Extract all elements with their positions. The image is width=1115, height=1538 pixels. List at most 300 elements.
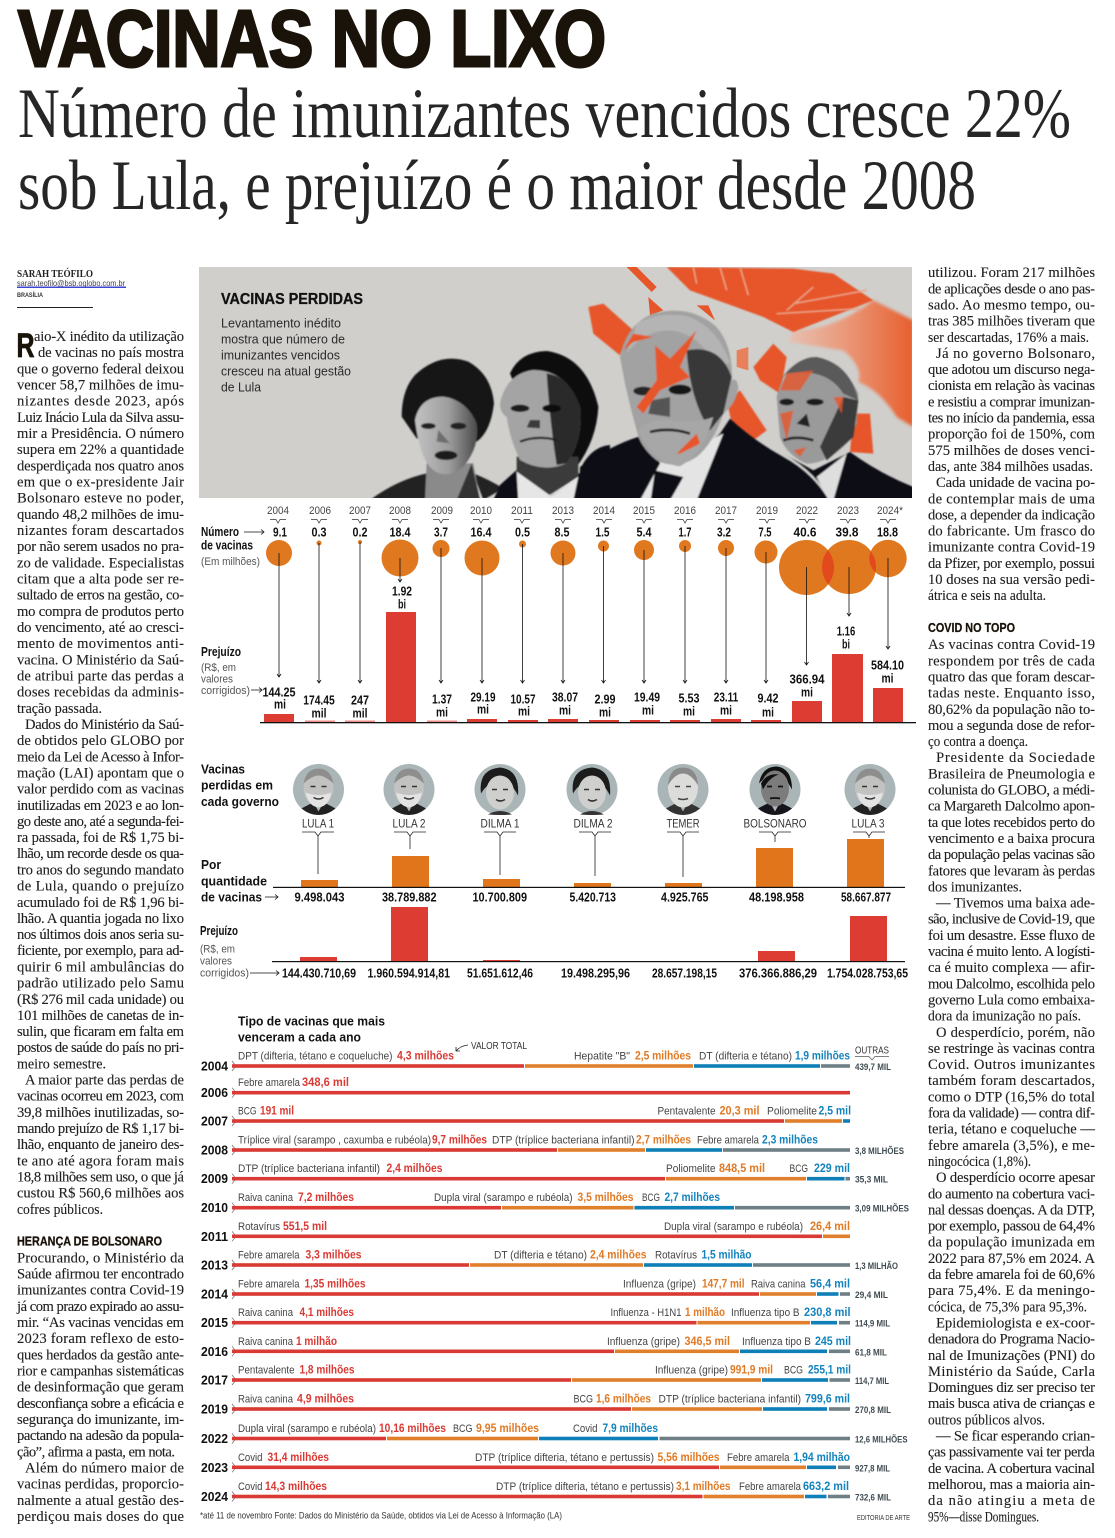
row 2014: Influenza (gripe) <box>623 1278 696 1290</box>
row 2024: 3,1 milhões <box>676 1481 730 1493</box>
left article column: te ano até agora foram mais <box>17 1153 184 1169</box>
vaccine count values: 1.7 <box>678 526 692 540</box>
row 2013: 3,3 milhões <box>306 1250 362 1262</box>
vaccine count values <box>273 526 898 540</box>
year labels: 2023 <box>837 505 859 517</box>
year labels: 2024* <box>877 505 904 517</box>
right article column: mou Dalcolmo, escolhida pelo <box>928 976 1095 992</box>
left article column: vacina. O Ministério da Saú- <box>17 652 184 668</box>
row 2010: Dupla viral (sarampo e rubéola) <box>434 1192 572 1204</box>
left article column: custou R$ 560,6 milhões aos <box>17 1186 184 1202</box>
right article column: dose, a depender da indicação <box>928 507 1095 523</box>
right article column: ningocócica (1,8%). <box>928 1154 1031 1170</box>
left article column: tro anos do segundo mandato <box>17 862 184 878</box>
row 2010: Raiva canina <box>238 1192 294 1204</box>
row 2015: Raiva canina <box>238 1307 294 1319</box>
portrait: Lula 1 <box>293 764 344 815</box>
right article column: vacina é muito lento. A logísti- <box>928 944 1095 960</box>
row 2019: DTP (tríplice bacteriana infantil) <box>658 1394 801 1406</box>
row 2015: 2015 <box>201 1316 228 1330</box>
portrait: Dilma 1 <box>474 764 526 815</box>
quantity values: 58.667.877 <box>841 890 891 904</box>
left article column: Bolsonaro esteve no poder, <box>17 491 184 507</box>
row 2004: Hepatite "B" <box>574 1050 630 1062</box>
row 2008: 2008 <box>201 1144 228 1158</box>
byline <box>17 268 126 308</box>
row 2015: Influenza - H1N1 <box>610 1307 682 1319</box>
row 2008: 9,7 milhões <box>432 1134 487 1146</box>
row 2016: 1 milhão <box>296 1336 337 1348</box>
left article column: zo de validade. Especialistas <box>17 555 184 571</box>
row 2007: 20,3 mil <box>720 1106 760 1118</box>
row 2007: 2,5 mil <box>818 1106 851 1118</box>
loss values: 1.37 <box>432 692 452 706</box>
row 2004: DPT (difteria, tétano e coqueluche) <box>238 1050 392 1062</box>
left article column: inutilizadas em 2023 e ao lon- <box>17 798 184 814</box>
left article column: vacinas perdidas, proporcio- <box>17 1477 184 1493</box>
left article column: vacinas ocorreu em 2023, com <box>17 1089 185 1105</box>
portrait: Dilma 2 <box>566 764 618 815</box>
row 2004: 2,5 milhões <box>635 1050 691 1062</box>
right article column: 80,62% da população não to- <box>928 702 1095 718</box>
left labels: (Em milhões) <box>201 556 260 568</box>
left article column: em que o ex-presidente Jair <box>17 475 184 491</box>
government names: DILMA 2 <box>574 816 613 830</box>
quantity bars <box>301 839 884 887</box>
year labels: 2022 <box>796 505 818 517</box>
row 2014: Raiva canina <box>751 1278 806 1290</box>
left article column: rior e campanhas sistemáticas <box>17 1364 184 1380</box>
row 2023: 31,4 milhões <box>268 1452 329 1464</box>
chart: vaccines and losses by year <box>201 505 916 723</box>
left article column: sulin, que ficaram em falta em <box>17 1024 185 1040</box>
left article column: lhão. A quantia jogada no lixo <box>17 911 184 927</box>
left article column: Além do número maior de <box>25 1461 184 1477</box>
year labels: 2010 <box>470 505 492 517</box>
right article column: ças passivamente vai ter perda <box>928 1445 1096 1461</box>
left article column: por não serem usados no pra- <box>17 539 184 555</box>
row 2010: 2,7 milhões <box>664 1192 720 1204</box>
right article column <box>928 265 1096 1525</box>
left article column: aio-X inédito da utilização <box>34 329 184 345</box>
left labels: Prejuízo <box>201 644 241 659</box>
row 2024: 2024 <box>201 1490 228 1504</box>
heading: cada governo <box>201 794 279 809</box>
right article column: vencimento e a baixa procura <box>928 831 1096 847</box>
right article column: de contemplar mais de uma <box>928 491 1096 507</box>
right article column: proporção foi de 150%, com <box>928 427 1096 443</box>
loss label: (R$, em <box>200 944 235 956</box>
right article column: do fabricante. Um frasco do <box>928 524 1095 540</box>
year labels: 2013 <box>552 505 574 517</box>
government names: BOLSONARO <box>744 816 806 830</box>
row 2019: 799,6 mil <box>805 1394 850 1406</box>
quantity values: 5.420.713 <box>570 890 616 904</box>
loss values: 584.10 <box>871 658 904 672</box>
row 2022: 12,6 MILHÕES <box>855 1434 908 1446</box>
right article column: Brasileira de Pneumologia e <box>928 766 1095 782</box>
loss values: mi <box>720 704 732 718</box>
vaccine count values: 39.8 <box>836 526 859 540</box>
right article column: das, ante 384 milhões usadas. <box>928 459 1093 475</box>
row 2008: 3,8 MILHÕES <box>855 1146 904 1157</box>
row 2015: Influenza tipo B <box>731 1307 800 1319</box>
annotation: others: OUTRAS <box>855 1044 889 1056</box>
government names: LULA 1 <box>302 816 334 830</box>
loss values: 247 <box>351 694 369 708</box>
heading <box>201 762 279 809</box>
heading: vaccine types <box>238 1014 385 1044</box>
right article column: quatro das que foram descar- <box>928 669 1095 685</box>
right article column: melhorou, mas a maioria ain- <box>928 1477 1095 1493</box>
loss values by government: 28.657.198,15 <box>652 966 717 980</box>
loss values: 23.11 <box>714 690 738 704</box>
row 2024 <box>201 1481 891 1504</box>
left article column: (R$ 276 mil cada unidade) ou <box>17 992 185 1008</box>
loss label: corrigidos) <box>200 968 249 980</box>
vaccine count values: 3.2 <box>717 526 731 540</box>
hero intro text: Levantamento inédito <box>221 316 341 330</box>
loss values: 38.07 <box>552 690 578 704</box>
loss label: valores <box>200 956 232 968</box>
right article column: foi um desastre. Esse fluxo de <box>928 928 1095 944</box>
row 2010: BCG <box>642 1192 660 1204</box>
loss values: 366.94 <box>790 672 825 686</box>
year labels <box>267 505 904 517</box>
government names: LULA 2 <box>392 816 426 830</box>
row 2023: 927,8 MIL <box>855 1463 890 1474</box>
row 2011: 551,5 mil <box>283 1221 327 1233</box>
vaccine count values: 0.3 <box>312 526 327 540</box>
row 2022 <box>201 1423 908 1446</box>
left article column: 39,8 milhões inutilizadas, so- <box>17 1105 184 1121</box>
left article column: do vencimento, até ao cresci- <box>17 620 184 636</box>
row 2017: Influenza (gripe) <box>655 1364 728 1376</box>
vaccine count values: 18.4 <box>390 526 411 540</box>
loss values: mil <box>352 706 368 720</box>
quantity label <box>201 857 267 904</box>
right article column: utilizou. Foram 217 milhões <box>928 265 1095 281</box>
row 2017: Pentavalente <box>238 1364 294 1376</box>
portrait: Bolsonaro <box>750 764 800 815</box>
left article column: Saúde afirmou ter encontrado <box>17 1267 184 1283</box>
right article column: dos imunizantes. <box>928 879 1022 895</box>
right article column: fatores que levaram às perdas <box>928 863 1095 879</box>
left article column: quirir 6 mil ambulâncias do <box>17 959 184 975</box>
right article column: se restringe às vacinas contra <box>928 1041 1096 1057</box>
row 2017: 1,8 milhões <box>300 1364 354 1376</box>
row 2009: 848,5 mil <box>719 1163 765 1175</box>
row 2004: 2004 <box>201 1060 228 1074</box>
row 2014: 2014 <box>201 1288 228 1302</box>
row 2023: 5,56 milhões <box>658 1452 720 1464</box>
row 2019: 2019 <box>201 1402 228 1416</box>
right article column: da população pelas vacinas são <box>928 847 1095 863</box>
row 2013: 2,4 milhões <box>590 1250 646 1262</box>
right article column: mou a segunda dose de refor- <box>928 718 1095 734</box>
loss values: 144.25 <box>262 686 296 700</box>
right article column: nal dessas doenças. A da DTP, <box>928 1202 1095 1218</box>
row 2006: 348,6 mil <box>302 1077 349 1089</box>
left article column: de vacinas no país mostra <box>38 345 185 361</box>
loss values: 29.19 <box>470 690 496 704</box>
annotation: others <box>855 1044 889 1060</box>
loss values: 1.92 <box>392 584 412 598</box>
row 2014: Febre amarela <box>238 1278 300 1290</box>
right article column: O desperdício, porém, não <box>936 1025 1095 1041</box>
bubbles <box>266 540 907 595</box>
loss values: 9.42 <box>758 692 779 706</box>
right article column: do aumento na cobertura vaci- <box>928 1186 1095 1202</box>
left labels: de vacinas <box>201 538 253 552</box>
loss values: mi <box>274 698 286 712</box>
hero intro text: cresceu na atual gestão <box>221 364 351 378</box>
right article column: para 75,4%. E da meningo- <box>928 1283 1095 1299</box>
loss values: 10.57 <box>510 692 536 706</box>
Dilma head <box>370 359 503 500</box>
right article column: Domingues diz ser preciso ter <box>928 1380 1095 1396</box>
loss values by government: 1.754.028.753,65 <box>827 966 908 980</box>
vaccine count values: 18.8 <box>877 526 898 540</box>
row 2016: Influenza tipo B <box>742 1336 811 1348</box>
left article column: 101 milhões de canetas de in- <box>17 1008 184 1024</box>
left article column: Luiz Inácio Lula da Silva assu- <box>17 410 184 426</box>
right article column: e resistiu a comprar imunizan- <box>928 394 1095 410</box>
left article column: mento de movimentos anti- <box>17 636 184 652</box>
left article column: de desinformação que geram <box>17 1380 185 1396</box>
row 2019: 4,9 milhões <box>297 1394 354 1406</box>
panel: hero photo illustration <box>199 267 913 500</box>
right article column: 2022 para 87,5% em 2024. A <box>928 1251 1095 1267</box>
right article column: governo Lula como embaixa- <box>928 992 1095 1008</box>
hero intro text: mostra que número de <box>221 332 345 346</box>
row 2004: 4,3 milhões <box>397 1050 454 1062</box>
row 2023 <box>201 1452 890 1475</box>
left labels: Número <box>201 524 239 539</box>
row 2008: DTP (tríplice bacteriana infantil) <box>492 1134 634 1146</box>
row 2022: 10,16 milhões <box>379 1423 446 1435</box>
row 2014: 1,35 milhões <box>304 1278 366 1290</box>
row 2004: 439,7 MIL <box>855 1062 891 1073</box>
loss bars <box>264 612 903 722</box>
year labels: 2011 <box>511 505 533 517</box>
byline: SARAH TEÓFILO <box>17 268 93 280</box>
row 2007: 2007 <box>201 1114 228 1128</box>
right article column: da Pfizer, por exemplo, possui <box>928 556 1095 572</box>
row 2008: 2,7 milhões <box>636 1134 691 1146</box>
loss label <box>200 923 249 980</box>
year labels: 2014 <box>593 505 615 517</box>
right article column: Cada unidade de vacina po- <box>936 475 1095 491</box>
right article column: imunizante contra Covid-19 <box>928 540 1095 556</box>
left article column: mir. “As vacinas vencidas em <box>17 1315 185 1331</box>
row 2011: Dupla viral (sarampo e rubéola) <box>664 1221 803 1233</box>
row 2017: BCG <box>784 1364 803 1376</box>
row 2013: DT (difteria e tétano) <box>494 1250 587 1262</box>
byline: sarah.teofilo@bsb.oglobo.com.br <box>17 278 125 288</box>
left article column: doses recebidas da adminis- <box>17 685 184 701</box>
row 2024: Covid <box>238 1481 262 1493</box>
right article column: teria, tétano e coqueluche — <box>928 1122 1095 1138</box>
row 2007: BCG <box>238 1106 256 1118</box>
row 2015: 1 milhão <box>685 1307 725 1319</box>
row 2017 <box>201 1364 889 1388</box>
right article column: ço contra a doença. <box>928 734 1028 750</box>
right article column: tes no início da pandemia, essa <box>928 410 1096 426</box>
left article column: ques herdados da gestão ante- <box>17 1347 184 1363</box>
right article column: — Tivemos uma baixa ade- <box>935 896 1095 912</box>
loss values: mi <box>762 706 774 720</box>
left article column: postos de saúde do país no pri- <box>17 1040 184 1056</box>
left article column: de obtidos pelo GLOBO por <box>17 733 184 749</box>
left article column: Procurando, o Ministério da <box>17 1250 185 1266</box>
right article column: O desperdício ocorre apesar <box>936 1170 1095 1186</box>
right article column: são, inclusive de Covid-19, que <box>928 912 1095 928</box>
right article column: de aplicações desde o ano pas- <box>928 281 1095 297</box>
hero heading: VACINAS PERDIDAS <box>221 291 363 308</box>
row 2022: Dupla viral (sarampo e rubéola) <box>238 1423 376 1435</box>
row 2019: Raiva canina <box>238 1394 294 1406</box>
right article column: da febre amarela foi de 60,6% <box>928 1267 1095 1283</box>
portrait: Temer <box>658 764 708 815</box>
left article column: cofres públicos. <box>17 1202 103 1218</box>
loss label: Prejuízo <box>200 923 238 938</box>
row 2011: 26,4 mil <box>810 1221 850 1233</box>
quantity label: de vacinas <box>201 890 262 904</box>
year labels: 2008 <box>389 505 411 517</box>
chart: vaccines lost per government <box>200 762 908 980</box>
row 2010: 3,09 MILHÕES <box>855 1204 909 1215</box>
left article column: pactando na adesão da popula- <box>17 1428 184 1444</box>
left article column: de atribui parte das perdas a <box>17 668 185 684</box>
row 2024: 732,6 MIL <box>855 1492 891 1504</box>
row 2014: 29,4 MIL <box>855 1290 888 1301</box>
left labels: valores <box>201 674 233 686</box>
row 2024: DTP (tríplice difteria, tétano e pertussis) <box>496 1481 674 1493</box>
vaccine count values: 3.7 <box>434 526 448 540</box>
row 2017: 991,9 mil <box>730 1364 773 1376</box>
left article column: go deste ano, até a segunda-fei- <box>17 814 184 830</box>
left article column: sultado de erros na gestão, co- <box>17 588 184 604</box>
left article column: mir a Presidência. O número <box>17 426 184 442</box>
row 2017: 2017 <box>201 1374 228 1388</box>
heading: vaccine types: Tipo de vacinas que mais <box>238 1014 385 1028</box>
left article column: nizantes foram descartados <box>17 523 184 539</box>
quantity values: 48.198.958 <box>749 890 804 904</box>
loss values by government: 1.960.594.914,81 <box>368 966 450 980</box>
loss values: mi <box>518 704 530 718</box>
row 2004: DT (difteria e tétano) <box>699 1050 792 1062</box>
year labels: 2007 <box>349 505 371 517</box>
loss values: mi <box>882 672 894 686</box>
row 2022: 7,9 milhões <box>602 1423 658 1435</box>
right article column: cócica, de 75,3% para 95,3%. <box>928 1299 1087 1315</box>
loss values: mi <box>801 686 813 700</box>
Lula head <box>580 311 828 500</box>
right article column: ser descartadas, 176% a mais. <box>928 330 1089 346</box>
left article column: ção”, afirma a pasta, em nota. <box>17 1444 175 1460</box>
row 2015: 114,9 MIL <box>855 1319 890 1330</box>
portrait: Lula 2 <box>384 764 434 815</box>
row 2017: 255,1 mil <box>808 1364 851 1376</box>
left article column: tração passada. <box>17 701 102 717</box>
left article column: perdiçou mais doses do que <box>17 1509 184 1525</box>
row 2019: BCG <box>574 1394 593 1406</box>
byline: BRASÍLIA <box>17 290 43 299</box>
heading: covid no topo: COVID NO TOPO <box>928 620 1015 635</box>
loss values <box>262 584 904 720</box>
right article column: nal de Imunizações (PNI) do <box>928 1348 1095 1364</box>
vaccine count values: 5.4 <box>636 526 652 540</box>
credit: EDITORIA DE ARTE <box>857 1513 910 1522</box>
row 2004 <box>201 1050 891 1074</box>
Bolsonaro head <box>493 351 610 500</box>
row 2022: BCG <box>453 1423 472 1435</box>
left labels <box>201 524 264 697</box>
row 2024: 663,2 mil <box>803 1481 849 1493</box>
row 2009: 229 mil <box>814 1163 850 1175</box>
row 2013: 1,3 MILHÃO <box>855 1261 898 1272</box>
right article column: como o DTP (16,5% do total <box>928 1089 1095 1105</box>
year labels: 2004 <box>267 505 289 517</box>
right article column: de vacina. A cobertura vacinal <box>928 1461 1095 1477</box>
year labels: 2015 <box>633 505 655 517</box>
quantity values: 10.700.809 <box>472 890 527 904</box>
row 2008: Tríplice viral (sarampo , caxumba e rubéola) <box>238 1134 431 1146</box>
loss values: mi <box>477 702 489 716</box>
right article column: 575 milhões de doses venci- <box>928 443 1095 459</box>
left labels: corrigidos) <box>201 685 250 697</box>
row 2014: 147,7 mil <box>702 1278 744 1290</box>
loss values: mi <box>599 706 611 720</box>
right article column: outros públicos alvos. <box>928 1412 1045 1428</box>
right article column: também foram descartados, <box>928 1073 1095 1089</box>
year labels: 2017 <box>715 505 737 517</box>
row 2011: Rotavírus <box>238 1221 280 1233</box>
right article column: Presidente da Sociedade <box>936 750 1095 766</box>
loss values: mil <box>312 706 326 720</box>
row 2011 <box>201 1221 850 1244</box>
row 2010: 2010 <box>201 1201 228 1215</box>
right article column: ca é muito complexa — afir- <box>928 960 1095 976</box>
right article column: 10 doses na sua versão pedi- <box>928 572 1095 588</box>
row 2009: 2,4 milhões <box>386 1163 442 1175</box>
arrows <box>277 542 890 683</box>
vaccine count values: 1.5 <box>596 526 610 540</box>
right article column: Covid. Outros imunizantes <box>928 1057 1095 1073</box>
row 2007: Pentavalente <box>658 1106 716 1118</box>
Temer head <box>777 357 913 500</box>
loss values by government: 144.430.710,69 <box>282 966 356 980</box>
loss values by government: 376.366.886,29 <box>739 966 817 980</box>
loss values by government: 51.651.612,46 <box>467 966 533 980</box>
row 2023: 1,94 milhão <box>794 1452 850 1464</box>
row 2008: 2,3 milhões <box>762 1134 818 1146</box>
annotation: total value: VALOR TOTAL <box>471 1040 527 1052</box>
right article column: da não atingiu a meta de <box>928 1493 1095 1509</box>
loss values: 2.99 <box>594 692 616 706</box>
row 2006: 2006 <box>201 1086 228 1100</box>
left article column <box>16 329 185 1525</box>
row 2019: 1,6 milhões <box>596 1394 651 1406</box>
left article column: imunizantes contra Covid-19 <box>17 1283 184 1299</box>
row 2007: Poliomelite <box>767 1106 817 1118</box>
right article column: fora da validade) — contra dif- <box>928 1106 1095 1122</box>
left article column: valor perdido com as vacinas <box>17 782 184 798</box>
row 2014 <box>201 1278 888 1302</box>
left article column: de Lula, quando o prejuízo <box>17 879 184 895</box>
left labels: (R$, em <box>201 662 236 674</box>
